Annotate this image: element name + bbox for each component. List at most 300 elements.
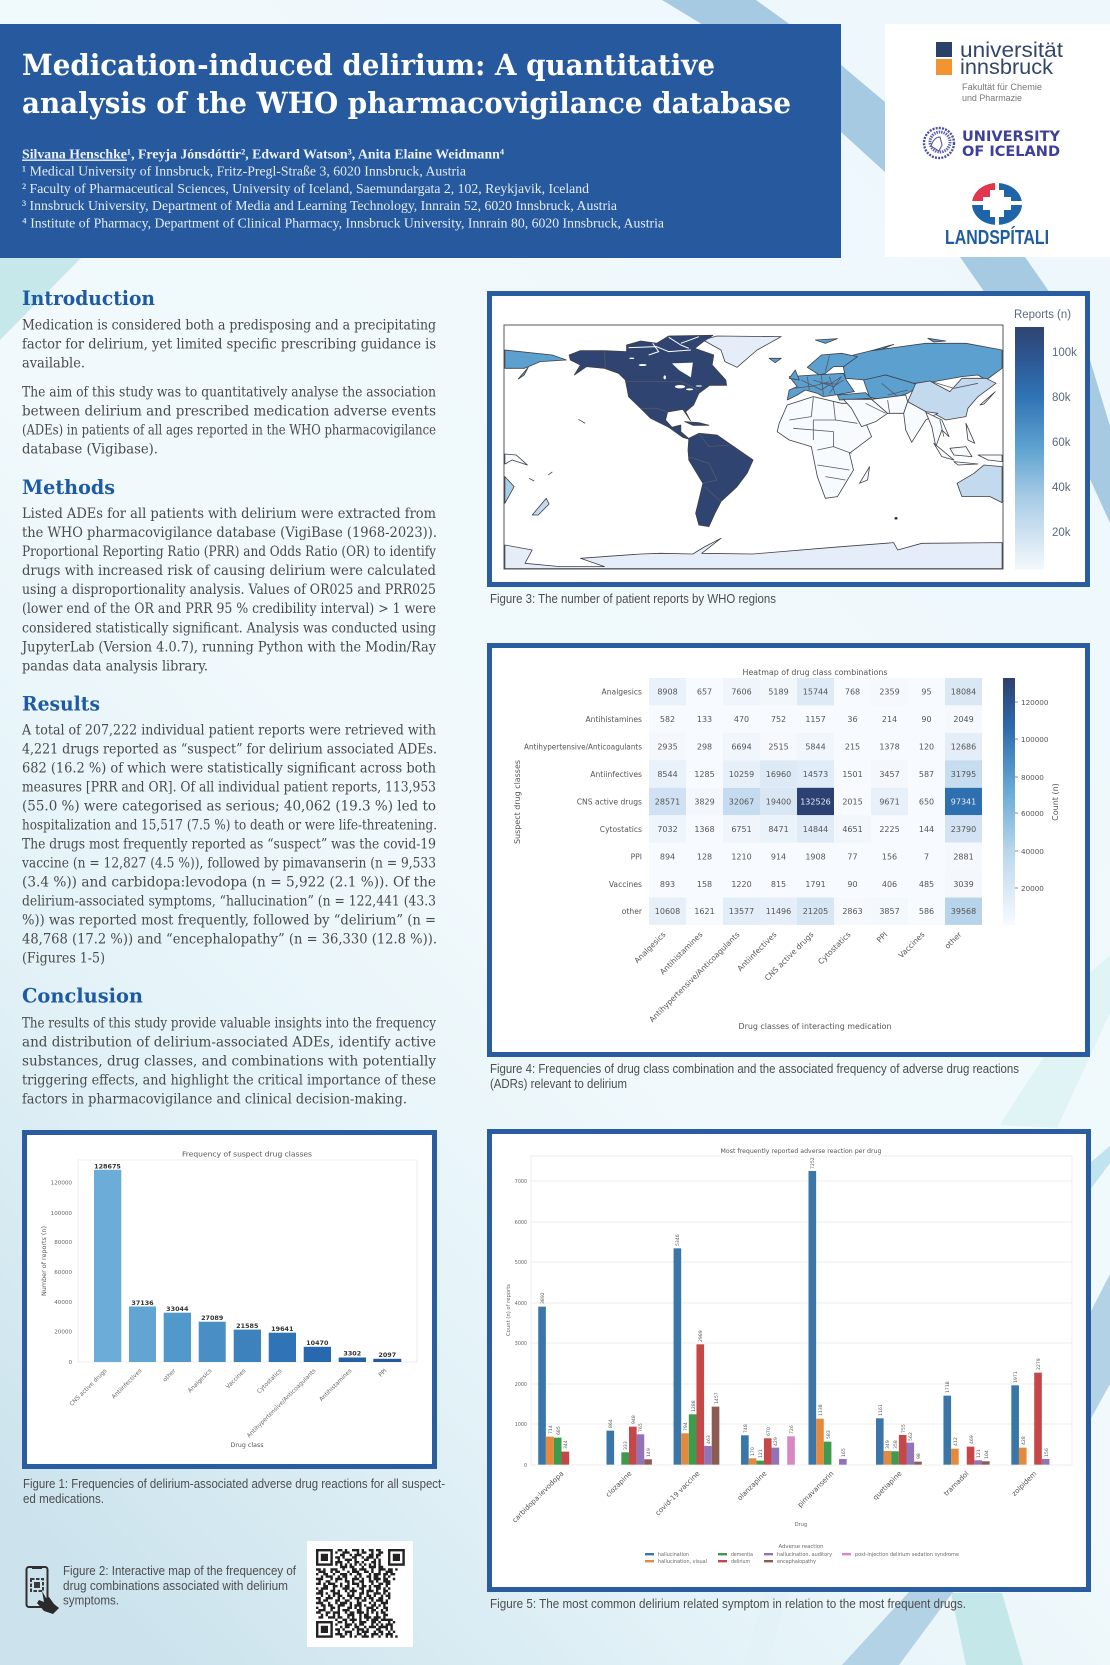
text: methods body: JupyterLab (Version 4.0.7), running Python with the Modin/Ray <box>20 640 436 656</box>
text: conclusion body: triggering effects, and highlight the critical importance of these <box>22 1072 436 1088</box>
logo: Landspítali: LANDSPÍTALI <box>945 226 1049 249</box>
x labels: Antihypertensive/Anticoagulants <box>246 1368 317 1439</box>
x labels: Antihistamines <box>319 1368 353 1403</box>
legend: hallucination <box>658 1552 689 1558</box>
heatmap cells: 2881 <box>953 852 974 861</box>
logo: Universität Innsbruck: Fakultät für Chemie <box>962 82 1042 92</box>
heatmap cells <box>649 678 982 925</box>
text: results body: 4,221 drugs reported as “suspect” for delirium associated ADEs. <box>22 742 437 758</box>
heatmap cells: 485 <box>919 880 934 889</box>
caption: figure 5: Figure 5: The most common delirium related symptom in relation to the most frequent drugs. <box>490 1597 966 1611</box>
heatmap cells: 657 <box>697 688 712 697</box>
heatmap cells: 144 <box>919 825 934 834</box>
text: conclusion body: substances, drug classes, and combinations with potentially <box>22 1053 436 1069</box>
heatmap colorbar: 20000 <box>1021 884 1044 893</box>
heatmap cells: 2359 <box>879 688 900 697</box>
text: results body: hospitalization and 15,517 (7.5 %) to death or were life-threatening. <box>22 818 437 834</box>
authors: Silvana Henschke¹, Freyja Jónsdóttir², Edward Watson³, Anita Elaine Weidmann⁴ <box>22 148 505 162</box>
colorbar legend: 20k <box>1052 527 1071 539</box>
x axis drug labels <box>511 1470 1039 1524</box>
text: introduction body: Medication is considered both a predisposing and a precipitating <box>22 318 436 334</box>
text: introduction body: (ADEs) in patients of all ages reported in the WHO pharmacovigilance <box>22 422 436 438</box>
heatmap cells: 2049 <box>953 715 974 724</box>
heatmap cells: 587 <box>919 770 934 779</box>
y ticks <box>515 1179 527 1469</box>
bar value labels: 121 <box>758 1449 764 1458</box>
affiliations <box>22 164 665 232</box>
heatmap cells: 1378 <box>879 743 900 752</box>
legend: Adverse reaction <box>778 1544 824 1550</box>
y ticks: 0 <box>524 1463 527 1469</box>
map <box>504 325 1003 569</box>
heatmap cells: 15744 <box>803 688 828 697</box>
heatmap cells: 11496 <box>766 907 791 916</box>
y ticks: 20000 <box>54 1330 72 1336</box>
bar value labels: 165 <box>841 1448 847 1457</box>
caption: figure 3: Figure 3: The number of patient reports by WHO regions <box>490 592 776 606</box>
bar value labels: 583 <box>826 1430 832 1439</box>
logo: Universität Innsbruck <box>936 39 1063 103</box>
bar value labels: 670 <box>766 1427 772 1436</box>
bar value labels: 1288 <box>691 1400 697 1412</box>
heatmap cells: 120 <box>919 743 934 752</box>
bar value labels: 726 <box>789 1425 795 1434</box>
text: methods body: (lower end of the OR and PRR 95 % credibility interval) > 1 were <box>22 601 436 617</box>
heatmap cells: 768 <box>845 688 860 697</box>
heatmap cells: 12686 <box>951 743 976 752</box>
y ticks: 120000 <box>51 1180 72 1186</box>
text: methods body: Proportional Reporting Ratio (PRR) and Odds Ratio (OR) to identify <box>22 544 436 560</box>
heatmap cells: 650 <box>919 798 934 806</box>
y ticks: 60000 <box>54 1270 72 1276</box>
heatmap cells: 14573 <box>803 770 828 779</box>
caption: figure 1: Figure 1: Frequencies of delirium-associated adverse drug reactions for all suspect- <box>23 1477 445 1491</box>
x axis label: Drug class <box>230 1441 264 1449</box>
text: results body: 682 (16.2 %) of which were statistically significant across both <box>22 761 436 777</box>
text: results body: The drugs most frequently reported as “suspect” was the covid-19 <box>22 837 436 853</box>
bar value labels: 27089 <box>201 1314 224 1322</box>
bar value labels: 33044 <box>166 1305 189 1313</box>
y ticks: 7000 <box>515 1179 527 1185</box>
heatmap row labels: other <box>622 907 643 916</box>
y axis label: Number of reports (n) <box>41 1226 48 1296</box>
heatmap row labels: CNS active drugs <box>577 798 642 806</box>
text: methods body: using a disproportionality analysis. Values of OR025 and PRR025 <box>22 582 436 598</box>
text: conclusion body: and distribution of delirium-associated ADEs, identify active <box>22 1034 436 1050</box>
heatmap cells: 39568 <box>951 907 976 916</box>
y ticks: 3000 <box>515 1341 527 1347</box>
heatmap cells: 23790 <box>951 825 976 834</box>
heatmap cells: 1791 <box>805 880 826 889</box>
bar value labels <box>94 1162 396 1359</box>
heatmap column labels: Antiinfectives <box>735 930 778 973</box>
bar value labels: 333 <box>623 1441 629 1450</box>
heatmap cells: 5844 <box>805 743 826 752</box>
heatmap cells: 9671 <box>879 798 900 806</box>
heatmap cells: 36 <box>847 715 858 724</box>
bar value labels: 2097 <box>378 1351 396 1359</box>
bar value labels: 98 <box>916 1453 922 1459</box>
legend: post-injection delirium sedation syndrome <box>855 1552 959 1558</box>
bar value labels: 1718 <box>945 1381 951 1393</box>
heatmap cells: 914 <box>771 852 786 861</box>
heatmap cells: 815 <box>771 880 786 889</box>
heatmap cells: 1368 <box>694 825 715 834</box>
text: introduction body: The aim of this study was to quantitatively analyse the association <box>22 384 436 400</box>
bar value labels: 428 <box>1021 1436 1027 1445</box>
bar value labels: 149 <box>646 1448 652 1457</box>
heatmap cells: 8908 <box>657 688 678 697</box>
bar value labels: 3302 <box>343 1350 361 1358</box>
legend: hallucination, visual <box>658 1559 707 1565</box>
heatmap cells: 7606 <box>731 688 752 697</box>
heading: conclusion: Conclusion <box>22 984 143 1007</box>
heatmap row labels: Antiinfectives <box>590 770 642 779</box>
heatmap cells: 18084 <box>951 688 976 697</box>
bar value labels: 7252 <box>810 1157 816 1169</box>
heatmap row labels: Analgesics <box>602 688 642 697</box>
heatmap cells: 2015 <box>842 798 863 806</box>
bar value labels <box>540 1157 1050 1459</box>
affiliations: ³ Innsbruck University, Department of Media and Learning Technology, Innrain 52, 6020 Innsbruck, Austria <box>22 199 618 214</box>
heatmap cells: 1220 <box>731 880 752 889</box>
heatmap cells: 7 <box>924 852 929 861</box>
heatmap row labels <box>524 688 643 916</box>
heatmap cells: 2225 <box>879 825 900 834</box>
heatmap cells: 90 <box>847 880 858 889</box>
heatmap colorbar: 120000 <box>1021 698 1049 707</box>
header banner <box>0 24 841 258</box>
x labels <box>69 1368 389 1439</box>
heading: methods: Methods <box>22 476 115 499</box>
text: results body: %)) was reported most frequently, followed by “delirium” (n = <box>22 913 436 929</box>
bar value labels: 685 <box>556 1426 562 1435</box>
x labels: CNS active drugs <box>69 1368 108 1408</box>
heatmap cells: 406 <box>882 880 897 889</box>
bar value labels: 948 <box>631 1415 637 1424</box>
bar value labels: 358 <box>893 1440 899 1449</box>
heatmap cells: 470 <box>734 715 749 724</box>
heatmap cells: 1285 <box>694 770 715 779</box>
legend: delirium <box>731 1559 750 1565</box>
heatmap cells: 1908 <box>805 852 826 861</box>
bars <box>538 1171 1049 1465</box>
heatmap cells: 8544 <box>657 770 678 779</box>
bar value labels: 156 <box>1044 1448 1050 1457</box>
heatmap cells: 19400 <box>766 798 791 806</box>
heatmap cells: 1157 <box>805 715 826 724</box>
text: results body: (Figures 1-5) <box>22 951 105 967</box>
logo: Universität Innsbruck: und Pharmazie <box>962 93 1022 103</box>
heatmap axis labels: Drug classes of interacting medication <box>738 1022 892 1031</box>
heatmap column labels: Vaccines <box>897 930 926 960</box>
affiliations: ¹ Medical University of Innsbruck, Fritz-Pregl-Straße 3, 6020 Innsbruck, Austria <box>22 164 467 180</box>
heatmap cells: 298 <box>697 743 712 752</box>
bar value labels: 1457 <box>714 1392 720 1404</box>
x axis drug labels: carbidopa:levodopa <box>511 1470 565 1524</box>
caption: figure 2: symptoms. <box>63 1594 119 1608</box>
bar value labels: 748 <box>743 1424 749 1433</box>
y ticks <box>51 1180 72 1366</box>
colorbar legend: 80k <box>1052 392 1071 404</box>
logo: Landspítali <box>945 181 1049 249</box>
heatmap cells: 21205 <box>803 907 828 916</box>
heatmap cells: 90 <box>921 715 932 724</box>
text: results body: vaccine (n = 12,827 (4.5 %)), followed by pimavanserin (n = 9,533 <box>21 856 436 872</box>
heatmap colorbar: 100000 <box>1021 735 1049 744</box>
bar value labels: 2279 <box>1036 1358 1042 1370</box>
heatmap cells: 2515 <box>768 743 789 752</box>
heatmap cells: 10259 <box>729 770 754 779</box>
text: conclusion body: The results of this study provide valuable insights into the frequency <box>22 1015 436 1031</box>
heatmap cells: 7032 <box>657 825 678 834</box>
heatmap cells: 3039 <box>953 880 974 889</box>
bar value labels: 170 <box>750 1447 756 1456</box>
heatmap cells: 6694 <box>731 743 752 752</box>
caption: figure 1 <box>23 1477 445 1506</box>
bar value labels: 37136 <box>131 1299 154 1307</box>
icon: phone scanning QR code <box>26 1567 59 1614</box>
heatmap cells: 6751 <box>731 825 752 834</box>
bar value labels: 864 <box>608 1419 614 1428</box>
heatmap column labels: Cytostatics <box>816 930 852 966</box>
bar value labels: 562 <box>908 1432 914 1441</box>
colorbar legend: 60k <box>1052 437 1071 449</box>
section: introduction <box>22 287 436 458</box>
heatmap cells: 894 <box>660 852 675 861</box>
heading: introduction: Introduction <box>22 287 155 310</box>
heatmap title: Heatmap of drug class combinations <box>742 668 888 677</box>
legend: hallucination, auditory <box>777 1552 832 1558</box>
text: results body: (55.0 %) were categorised as serious; 40,062 (19.3 %) led to <box>22 799 436 815</box>
bar value labels: 755 <box>901 1424 907 1433</box>
heatmap row labels: Antihypertensive/Anticoagulants <box>524 743 642 752</box>
heatmap cells: 215 <box>845 743 860 752</box>
bars <box>94 1170 401 1362</box>
heatmap row labels: PPI <box>631 852 642 861</box>
heatmap axis labels: Count (n) <box>1051 783 1060 821</box>
bar value labels: 1971 <box>1013 1371 1019 1383</box>
section: methods <box>20 476 437 674</box>
y ticks: 1000 <box>515 1422 527 1428</box>
y ticks: 2000 <box>515 1382 527 1388</box>
bar value labels: 2989 <box>698 1330 704 1342</box>
logo: Universität Innsbruck: universität <box>960 39 1063 62</box>
panel: figure 1 bar chart <box>24 1132 434 1466</box>
x labels: Antiinfectives <box>111 1368 143 1400</box>
bar value labels: 21585 <box>236 1322 258 1330</box>
logo: University of Iceland: OF ICELAND <box>962 144 1060 160</box>
heatmap cells: 1621 <box>694 907 715 916</box>
x axis drug labels: clozapine <box>604 1470 633 1499</box>
x axis drug labels: tramadol <box>942 1470 970 1498</box>
heatmap cells: 214 <box>882 715 897 724</box>
heatmap cells: 893 <box>660 880 675 889</box>
text: introduction body <box>22 318 436 458</box>
bar value labels: 104 <box>984 1450 990 1459</box>
heatmap column labels <box>632 929 964 1024</box>
x axis drug labels: zolpidem <box>1010 1470 1039 1498</box>
heatmap cells: 13577 <box>729 907 754 916</box>
text: results body <box>21 723 437 967</box>
x labels: Analgesics <box>187 1368 213 1394</box>
chart title: Most frequently reported adverse reaction per drug <box>720 1148 882 1155</box>
y ticks: 80000 <box>54 1240 72 1246</box>
heatmap column labels: CNS active drugs <box>763 930 815 983</box>
heatmap cells: 2863 <box>842 907 863 916</box>
heatmap cells: 14844 <box>803 825 828 834</box>
colorbar legend <box>1014 309 1077 570</box>
heatmap column labels: Antihistamines <box>658 930 704 976</box>
heatmap cells: 2935 <box>657 743 678 752</box>
caption: figure 2: Figure 2: Interactive map of the frequencey of <box>63 1564 296 1578</box>
text: introduction body: factor for delirium, yet limited specific prescribing guidance is <box>22 336 436 352</box>
heatmap row labels: Antihistamines <box>585 715 642 724</box>
heatmap cells: 1501 <box>842 770 863 779</box>
legend: dementia <box>731 1552 753 1558</box>
plot frame <box>78 1160 417 1362</box>
text: results body: 48,768 (17.2 %)) and “encephalopathy” (n = 36,330 (12.8 %)). <box>22 932 437 948</box>
text: introduction body: available. <box>22 356 85 372</box>
heatmap colorbar: 80000 <box>1021 773 1044 782</box>
x axis drug labels: covid-19 vaccine <box>654 1470 701 1517</box>
caption: figure 4 <box>490 1062 1019 1091</box>
y ticks: 0 <box>68 1360 72 1366</box>
heatmap cells: 132526 <box>800 798 831 806</box>
logo: University of Iceland <box>924 128 1061 160</box>
section: results <box>21 692 437 967</box>
heatmap cells: 3829 <box>694 798 715 806</box>
bar value labels: 19641 <box>271 1325 293 1333</box>
text: results body: measures [PRR and OR]. Of all individual patient reports, 113,953 <box>22 780 436 796</box>
affiliations: ⁴ Institute of Pharmacy, Department of Clinical Pharmacy, Innsbruck University, Innrain 80, 6020 Innsbruck, Austria <box>22 216 665 232</box>
bar value labels: 765 <box>638 1423 644 1432</box>
x labels: other <box>162 1368 178 1383</box>
section: conclusion <box>22 984 436 1107</box>
bar value labels: 128675 <box>94 1162 121 1170</box>
QR code <box>307 1541 413 1647</box>
heatmap column labels: Analgesics <box>632 930 667 965</box>
heatmap cells: 158 <box>697 880 712 889</box>
y axis label: Count (n) of reports <box>506 1284 512 1336</box>
heatmap cells: 32067 <box>729 798 754 806</box>
grid <box>531 1156 1072 1465</box>
bar value labels: 469 <box>969 1435 975 1444</box>
heatmap column labels: Antihypertensive/Anticoagulants <box>647 930 741 1024</box>
y ticks: 4000 <box>515 1301 527 1307</box>
caption: figure 2: drug combinations associated with delirium <box>63 1579 288 1593</box>
text: conclusion body: factors in pharmacovigilance and clinical decision-making. <box>22 1091 407 1107</box>
heatmap colorbar: 40000 <box>1021 847 1044 856</box>
text: methods body: pandas data analysis library. <box>22 658 208 674</box>
heatmap row labels: Cytostatics <box>600 825 642 834</box>
text: results body: delirium-associated symptoms, “hallucination” (n = 122,441 (43.3 <box>22 894 436 910</box>
panel: figure 4 heatmap <box>490 646 1088 1054</box>
x axis drug labels: quetiapine <box>871 1470 903 1502</box>
bar value labels: 1138 <box>818 1404 824 1416</box>
chart title: Frequency of suspect drug classes <box>182 1151 312 1159</box>
colorbar legend: 100k <box>1052 347 1077 359</box>
bar value labels: 714 <box>548 1425 554 1434</box>
bar value labels: 794 <box>683 1422 689 1431</box>
text: methods body: Listed ADEs for all patients with delirium were extracted from <box>22 506 436 522</box>
caption: figure 2 <box>63 1564 296 1608</box>
x axis drug labels: pimavanserin <box>796 1470 835 1509</box>
heatmap cells: 156 <box>882 852 897 861</box>
title: analysis of the WHO pharmacovigilance database <box>22 86 791 120</box>
heatmap cells: 3857 <box>879 907 900 916</box>
title <box>22 48 791 120</box>
bar value labels: 10470 <box>306 1339 329 1347</box>
y ticks: 6000 <box>515 1220 527 1226</box>
heatmap cells: 5189 <box>768 688 789 697</box>
bar value labels: 349 <box>885 1440 891 1449</box>
legend: encephalopathy <box>777 1559 816 1565</box>
heatmap cells: 95 <box>921 688 932 697</box>
heatmap cells: 586 <box>919 907 934 916</box>
heatmap column labels: other <box>943 929 964 951</box>
heatmap cells: 31795 <box>951 770 976 779</box>
bar value labels: 429 <box>773 1437 779 1446</box>
y ticks: 5000 <box>515 1260 527 1266</box>
heatmap cells: 8471 <box>768 825 789 834</box>
heatmap cells: 97341 <box>951 798 976 806</box>
legend <box>645 1544 959 1565</box>
x labels: Cytostatics <box>256 1368 283 1395</box>
bar value labels: 5346 <box>675 1234 681 1246</box>
colorbar legend: 40k <box>1052 482 1071 494</box>
x axis drug labels: olanzapine <box>736 1470 768 1502</box>
heatmap cells: 1210 <box>731 852 752 861</box>
title: Medication-induced delirium: A quantitative <box>22 48 715 82</box>
heatmap cells: 752 <box>771 715 786 724</box>
heatmap colorbar <box>1003 678 1049 925</box>
heading: results: Results <box>22 692 100 716</box>
heatmap axis labels: Suspect drug classes <box>513 760 522 844</box>
bar value labels: 344 <box>563 1440 569 1449</box>
text: results body: A total of 207,222 individual patient reports were retrieved with <box>21 723 436 739</box>
logo: Universität Innsbruck: innsbruck <box>960 56 1054 79</box>
heatmap cells: 10608 <box>655 907 680 916</box>
text: introduction body: between delirium and prescribed medication adverse events <box>22 404 436 420</box>
heatmap cells: 582 <box>660 715 675 724</box>
text: methods body: the WHO pharmacovigilance database (VigiBase (1968-2023)). <box>22 525 437 541</box>
panel: figure 5 grouped bar chart <box>490 1132 1088 1590</box>
x labels: PPI <box>378 1368 389 1379</box>
heatmap cells: 133 <box>697 715 712 724</box>
heatmap cells: 28571 <box>655 798 680 806</box>
heatmap cells: 128 <box>697 852 712 861</box>
panel: figure 3 world map <box>490 294 1088 584</box>
text: methods body <box>20 506 437 674</box>
text: methods body: drugs with increased risk of causing delirium were calculated <box>22 563 436 579</box>
heatmap axis labels <box>513 760 1060 1031</box>
logo: University of Iceland: UNIVERSITY <box>962 129 1061 145</box>
logo panel <box>885 24 1110 257</box>
x axis label: Drug <box>795 1522 807 1528</box>
heatmap colorbar: 60000 <box>1021 809 1044 818</box>
text: introduction body: database (Vigibase). <box>22 442 158 458</box>
bar value labels: 412 <box>953 1437 959 1446</box>
bar value labels: 463 <box>706 1435 712 1444</box>
y ticks: 40000 <box>54 1300 72 1306</box>
text: results body: (3.4 %)) and carbidopa:levodopa (n = 5,922 (2.1 %)). Of the <box>22 875 436 891</box>
y ticks: 100000 <box>51 1211 72 1217</box>
bar value labels: 121 <box>976 1449 982 1458</box>
text: methods body: considered statistically significant. Analysis was conducted using <box>22 620 436 636</box>
caption: figure 4: (ADRs) relevant to delirium <box>490 1077 627 1091</box>
caption: figure 1: ed medications. <box>23 1492 104 1506</box>
